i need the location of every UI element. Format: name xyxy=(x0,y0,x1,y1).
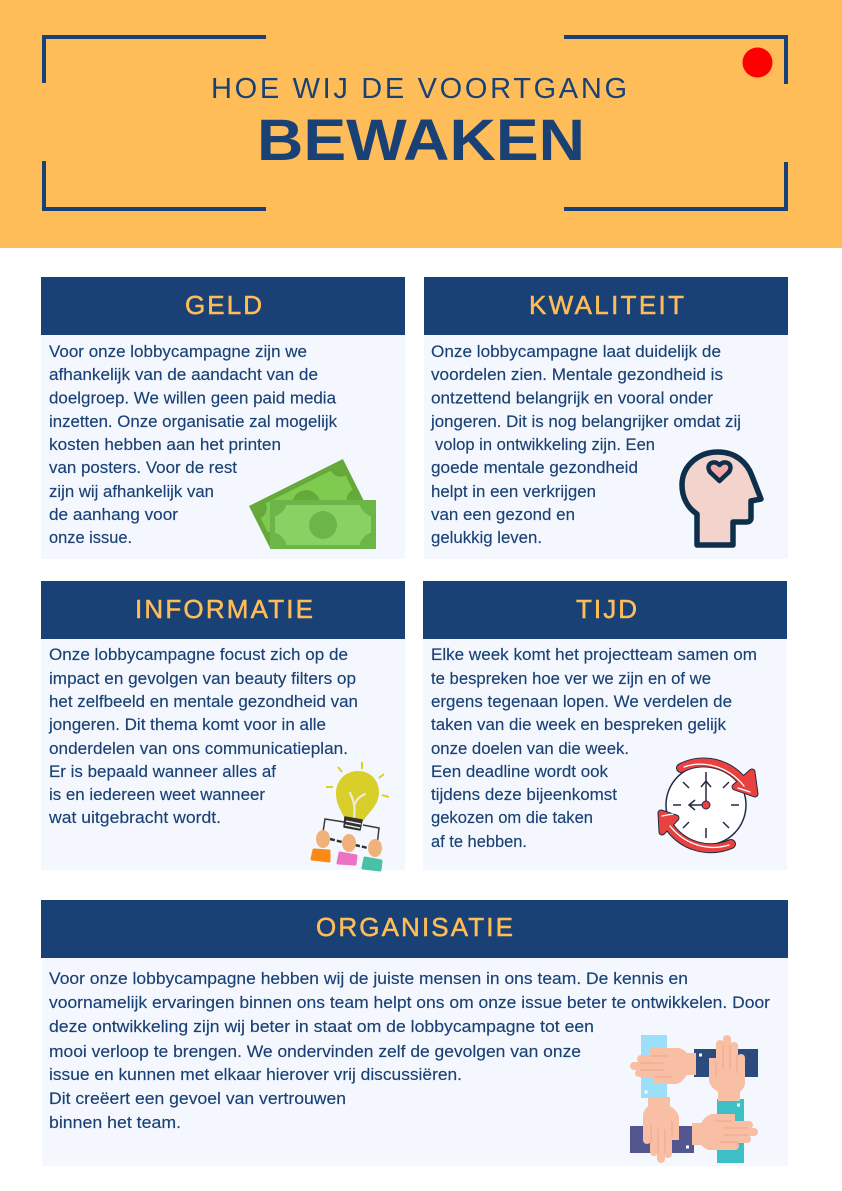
text block: organisatie: Voor onze lobbycampagne hebben wij de juiste mensen in ons team. De kennis en xyxy=(49,970,688,988)
text block: tijd: taken van die week en bespreken gelijk xyxy=(431,716,727,734)
heading: informatie: INFORMATIE xyxy=(135,594,313,624)
text block: tijd: ergens tegenaan lopen. We verdelen de xyxy=(431,693,732,711)
heading: kwaliteit: KWALITEIT xyxy=(529,290,684,320)
text block: informatie: Onze lobbycampagne focust zich op de xyxy=(49,646,348,664)
text block: geld: de aanhang voor xyxy=(49,506,179,524)
title line: hoe wij de voortgang: HOE WIJ DE VOORTGANG xyxy=(211,73,627,105)
text block: geld: Voor onze lobbycampagne zijn we xyxy=(49,343,307,361)
text block: geld: van posters. Voor de rest xyxy=(49,459,237,477)
text block: geld: afhankelijk van de aandacht van de xyxy=(49,366,318,384)
text block: organisatie: issue en kunnen met elkaar hierover vrij discussiëren. xyxy=(49,1066,462,1084)
text block: organisatie: Dit creëert een gevoel van vertrouwen xyxy=(49,1090,346,1108)
icon: head with heart xyxy=(682,452,761,545)
text block: informatie: het zelfbeeld en mentale gezondheid van xyxy=(49,693,358,711)
text block: kwaliteit: voordelen zien. Mentale gezondheid is xyxy=(431,366,723,384)
text block: tijd: te bespreken hoe ver we zijn en of we xyxy=(431,670,711,688)
text block: tijd: af te hebben. xyxy=(431,833,527,851)
text block: geld: kosten hebben aan het printen xyxy=(49,436,281,454)
text block: organisatie: binnen het team. xyxy=(49,1114,181,1132)
text block: geld: doelgroep. We willen geen paid media xyxy=(49,390,337,408)
icon: red recording dot xyxy=(742,48,772,78)
title: bewaken: BEWAKEN xyxy=(257,108,585,173)
panel: tijd xyxy=(423,581,787,870)
panel: informatie xyxy=(41,581,405,870)
header banner xyxy=(0,0,842,248)
text block: tijd xyxy=(431,646,757,851)
text block: organisatie: mooi verloop te brengen. We ondervinden zelf de gevolgen van onze xyxy=(49,1043,581,1061)
text block: informatie: jongeren. Dit thema komt voor in alle xyxy=(48,716,326,734)
text block: tijd: Elke week komt het projectteam samen om xyxy=(431,646,757,664)
icon: light bulb and team xyxy=(312,762,389,870)
panel: organisatie xyxy=(41,900,788,1166)
text block: geld: zijn wij afhankelijk van xyxy=(49,483,214,501)
heading: organisatie: ORGANISATIE xyxy=(316,912,513,942)
text block: kwaliteit xyxy=(430,343,741,547)
text block: tijd: onze doelen van die week. xyxy=(431,740,629,758)
text block: kwaliteit: van een gezond en xyxy=(431,506,575,524)
viewfinder frame corners xyxy=(44,37,786,209)
text block: kwaliteit: Onze lobbycampagne laat duidelijk de xyxy=(431,343,721,361)
text block: informatie xyxy=(48,646,358,827)
panel: kwaliteit xyxy=(424,277,788,559)
text block: informatie: Er is bepaald wanneer alles af xyxy=(49,763,276,781)
text block: geld: inzetten. Onze organisatie zal mogelijk xyxy=(49,413,338,431)
text block: geld xyxy=(49,343,338,547)
panel: geld xyxy=(41,277,405,559)
text block: geld: onze issue. xyxy=(49,529,132,547)
text block: tijd: gekozen om die taken xyxy=(431,809,593,827)
heading: geld: GELD xyxy=(185,290,262,320)
text block: kwaliteit: goede mentale gezondheid xyxy=(431,459,638,477)
text block: kwaliteit: gelukkig leven. xyxy=(431,529,542,547)
heading: tijd: TIJD xyxy=(576,594,637,624)
text block: kwaliteit: jongeren. Dit is nog belangrijker omdat zij xyxy=(430,413,741,431)
icon: four linked hands xyxy=(630,1035,758,1163)
text block: tijd: Een deadline wordt ook xyxy=(431,763,609,781)
text block: kwaliteit: volop in ontwikkeling zijn. Een xyxy=(435,436,655,454)
text block: organisatie xyxy=(49,970,771,1132)
text block: organisatie: voornamelijk ervaringen binnen ons team helpt ons om onze issue beter te ontwikkelen. Door xyxy=(49,994,771,1012)
icon: banknotes xyxy=(249,459,376,549)
text block: informatie: onderdelen van ons communicatieplan. xyxy=(49,740,348,758)
text block: tijd: tijdens deze bijeenkomst xyxy=(431,786,617,804)
text block: kwaliteit: ontzettend belangrijk en vooral onder xyxy=(431,390,714,408)
text block: organisatie: deze ontwikkeling zijn wij beter in staat om de lobbycampagne tot een xyxy=(49,1018,594,1036)
text block: informatie: wat uitgebracht wordt. xyxy=(48,809,221,827)
text block: informatie: is en iedereen weet wanneer xyxy=(49,786,266,804)
text block: kwaliteit: helpt in een verkrijgen xyxy=(431,483,596,501)
text block: informatie: impact en gevolgen van beauty filters op xyxy=(49,670,356,688)
icon: clock with arrows xyxy=(661,762,755,848)
